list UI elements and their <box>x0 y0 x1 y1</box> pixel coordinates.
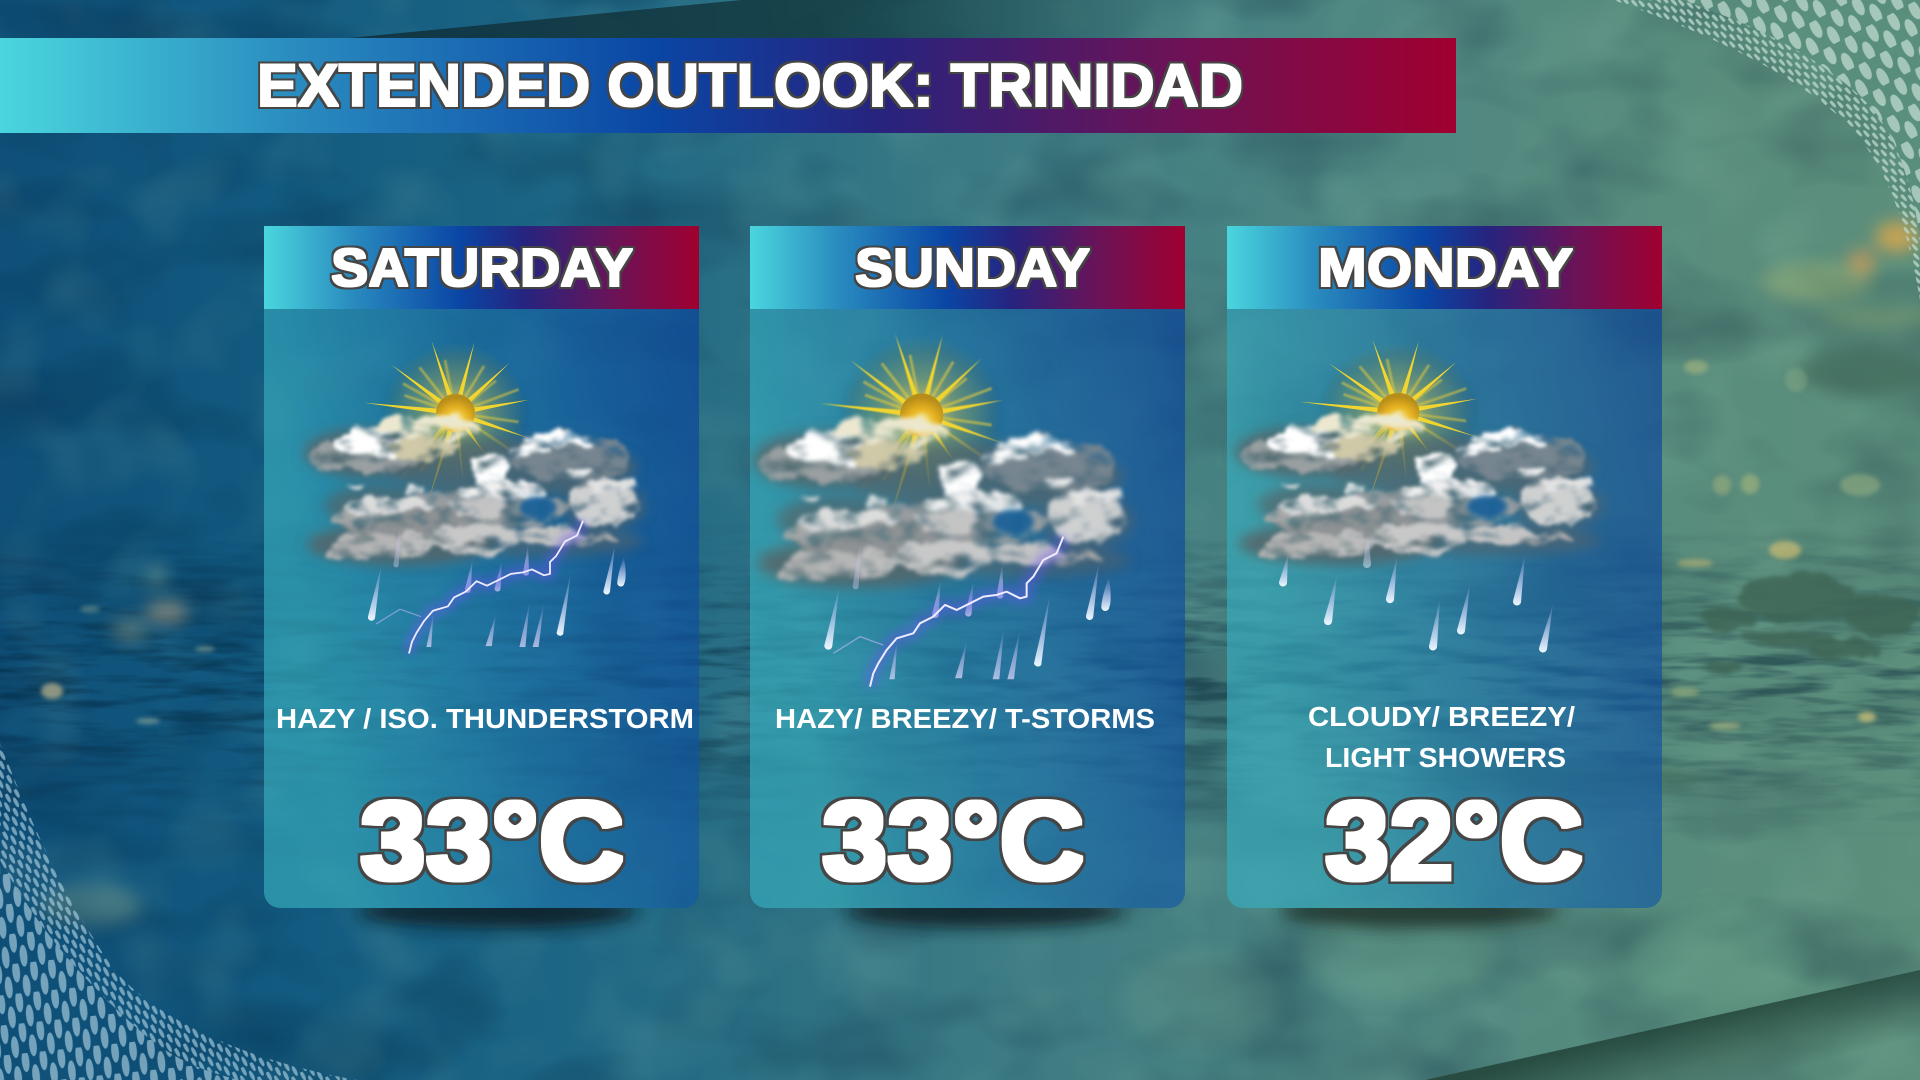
Saturday header: SATURDAY <box>331 238 633 298</box>
Monday temperature: 32°C <box>1325 780 1583 903</box>
halftone wave: top right <box>1610 0 1920 300</box>
Saturday header <box>264 226 699 309</box>
Sunday header: SUNDAY <box>855 238 1090 298</box>
panel: Sunday <box>750 226 1185 908</box>
title banner <box>0 38 1456 133</box>
icon: sun, clouds and lightning <box>753 333 1133 687</box>
Sunday temperature: 33°C <box>822 780 1084 903</box>
Monday condition: LIGHT SHOWERS <box>1325 742 1566 773</box>
halftone wave: bottom left <box>0 740 360 1080</box>
Saturday temperature: 33°C <box>360 780 624 903</box>
Sunday header <box>750 226 1185 309</box>
Sunday condition: HAZY/ BREEZY/ T-STORMS <box>775 703 1155 734</box>
decorative wedge: top <box>349 0 1250 38</box>
dark splash <box>1702 573 1918 672</box>
Monday condition <box>1308 701 1575 773</box>
title: EXTENDED OUTLOOK: TRINIDAD <box>257 52 1243 119</box>
Monday condition: CLOUDY/ BREEZY/ <box>1308 701 1575 732</box>
icon: sun, clouds and lightning <box>304 341 646 654</box>
icon: sun, clouds and rain <box>1235 340 1603 653</box>
decorative wedge: bottom right <box>1425 970 1920 1080</box>
Saturday condition: HAZY / ISO. THUNDERSTORM <box>276 703 694 734</box>
Monday header: MONDAY <box>1318 238 1573 298</box>
panel: Monday <box>1227 226 1662 908</box>
card shadows <box>358 896 1560 928</box>
Monday header <box>1227 226 1662 309</box>
panel: Saturday <box>264 226 699 908</box>
